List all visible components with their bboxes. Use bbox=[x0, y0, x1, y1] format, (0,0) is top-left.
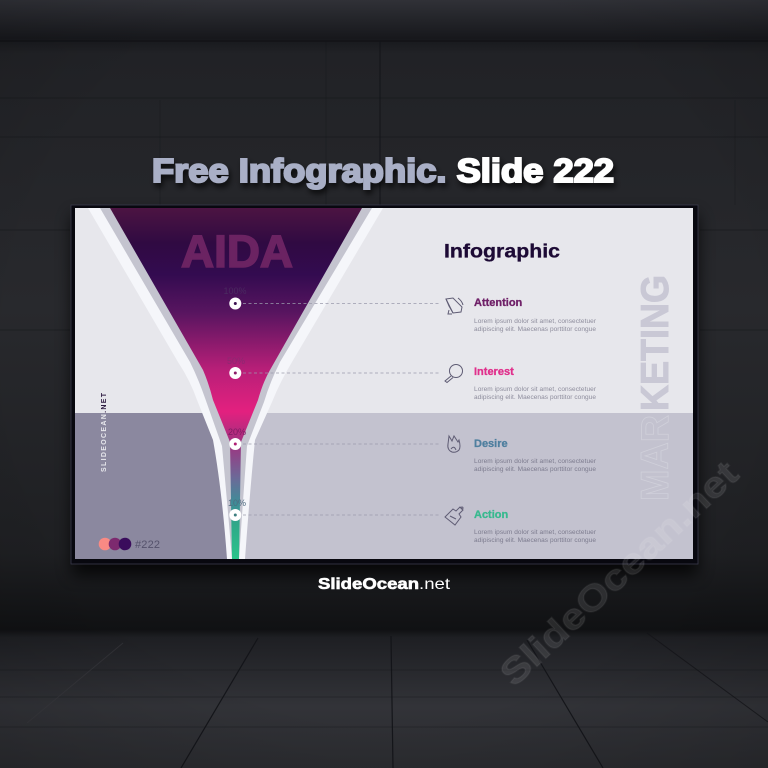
footer brand: SlideOcean .net bbox=[318, 576, 451, 593]
slide number: #222 bbox=[135, 539, 160, 551]
infographic heading: Infographic bbox=[444, 242, 560, 262]
slide frame bbox=[71, 205, 698, 564]
slide lower left background bbox=[75, 413, 235, 559]
marker 100% bbox=[224, 288, 246, 310]
funnel heading AIDA: AIDA bbox=[181, 226, 293, 277]
slide panel bbox=[75, 208, 693, 559]
dashed leader lines bbox=[243, 304, 440, 515]
item: attention bbox=[474, 297, 597, 333]
item: interest: Interest bbox=[474, 366, 514, 378]
palette circles bbox=[99, 538, 131, 550]
marker 20% bbox=[228, 427, 246, 450]
item: action: Action bbox=[474, 509, 508, 521]
item: attention: adipiscing elit. Maecenas porttitor congue bbox=[474, 326, 596, 333]
marker 50% bbox=[227, 356, 245, 379]
item: action: adipiscing elit. Maecenas porttitor congue bbox=[474, 537, 596, 544]
marker 20%: 20% bbox=[228, 427, 246, 437]
item: desire: adipiscing elit. Maecenas porttitor congue bbox=[474, 466, 596, 473]
item: interest bbox=[474, 366, 597, 401]
slide lower right background bbox=[240, 413, 693, 559]
icon: flask bbox=[445, 507, 463, 525]
item: action: Lorem ipsum dolor sit amet, consectetuer bbox=[474, 529, 597, 536]
slide shadow bbox=[72, 215, 698, 575]
funnel gradient body bbox=[110, 208, 362, 559]
item: desire bbox=[474, 438, 597, 473]
item: interest: Lorem ipsum dolor sit amet, consectetuer bbox=[474, 386, 597, 393]
marker 10% bbox=[228, 498, 246, 521]
icon: megaphone bbox=[446, 298, 463, 314]
funnel white outer band bbox=[88, 208, 383, 559]
marker 10%: 10% bbox=[228, 498, 246, 508]
marketing vertical word bbox=[640, 276, 669, 499]
watermark: SlideOcean.net bbox=[491, 452, 746, 694]
item: attention: Attention bbox=[474, 297, 523, 309]
item: interest: adipiscing elit. Maecenas porttitor congue bbox=[474, 394, 596, 401]
item: action bbox=[474, 509, 597, 544]
slide upper background bbox=[75, 208, 693, 413]
marketing vertical word: MAR bbox=[634, 415, 677, 501]
marker 100%: 100% bbox=[223, 286, 247, 296]
title: Free Infographic. Slide 222 bbox=[152, 152, 614, 189]
vertical site label: SLIDEOCEAN.NET bbox=[101, 392, 108, 472]
icon: flame bbox=[448, 436, 460, 452]
funnel grey band bbox=[100, 208, 372, 559]
marker 50%: 50% bbox=[227, 356, 245, 366]
icon: magnifier bbox=[445, 364, 462, 382]
item: attention: Lorem ipsum dolor sit amet, consectetuer bbox=[474, 318, 597, 325]
item: desire: Lorem ipsum dolor sit amet, consectetuer bbox=[474, 458, 597, 465]
item: desire: Desire bbox=[474, 438, 508, 450]
marketing vertical word: KETING bbox=[634, 275, 677, 411]
